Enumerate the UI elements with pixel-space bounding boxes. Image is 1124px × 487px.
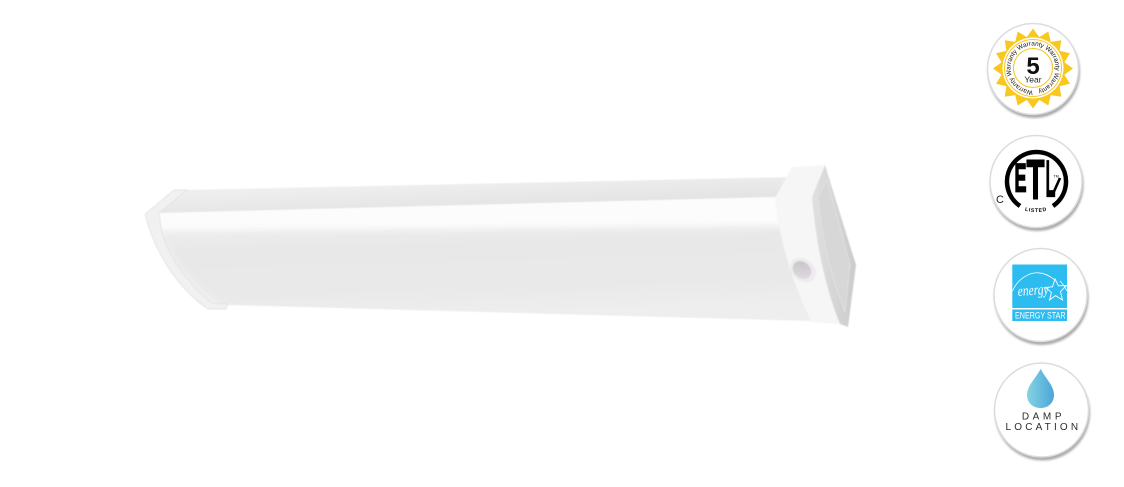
logo footer strip: [1012, 310, 1067, 321]
fixture front lens: [162, 197, 811, 321]
badge: damp location: [994, 363, 1090, 460]
warranty ring text: Warranty Warranty Warranty Warranty Warranty: [1006, 42, 1060, 96]
icon: ETL ring: [1007, 152, 1066, 206]
year label: Year: [1024, 74, 1042, 84]
end face recess: [818, 180, 850, 312]
logo star: [1046, 279, 1066, 300]
fixture top face: [159, 177, 795, 213]
product: LED wraparound light fixture: [145, 165, 856, 330]
damp label: DAMP: [1022, 412, 1065, 422]
location label: LOCATION: [1006, 422, 1080, 433]
left end cap: [145, 190, 228, 309]
icon: yellow sunburst seal: [993, 28, 1073, 108]
icon: water drop: [1027, 369, 1054, 408]
listed text: LISTED: [1025, 207, 1046, 212]
right end face: [812, 165, 856, 327]
badge: ETL listed: L: [1046, 150, 1056, 208]
right end cap: [775, 165, 840, 324]
logo script: energy: [1017, 282, 1049, 300]
badge: 5 year warranty: [986, 22, 1082, 120]
badge: ETL listed: [989, 134, 1085, 232]
badge: Energy Star: [994, 248, 1088, 345]
ETL letter T: T: [1026, 148, 1044, 210]
badge: ETL listed: E: [1014, 156, 1026, 200]
logo panel: [1012, 264, 1067, 308]
number 5: 5: [1026, 53, 1040, 80]
ETL L tail: [1052, 178, 1060, 196]
occupancy sensor: [785, 253, 821, 287]
trademark: TM: [1054, 174, 1059, 178]
logo label: ENERGY STAR: [1015, 311, 1066, 322]
C mark: C: [996, 194, 1004, 206]
logo arc: [1012, 273, 1067, 291]
